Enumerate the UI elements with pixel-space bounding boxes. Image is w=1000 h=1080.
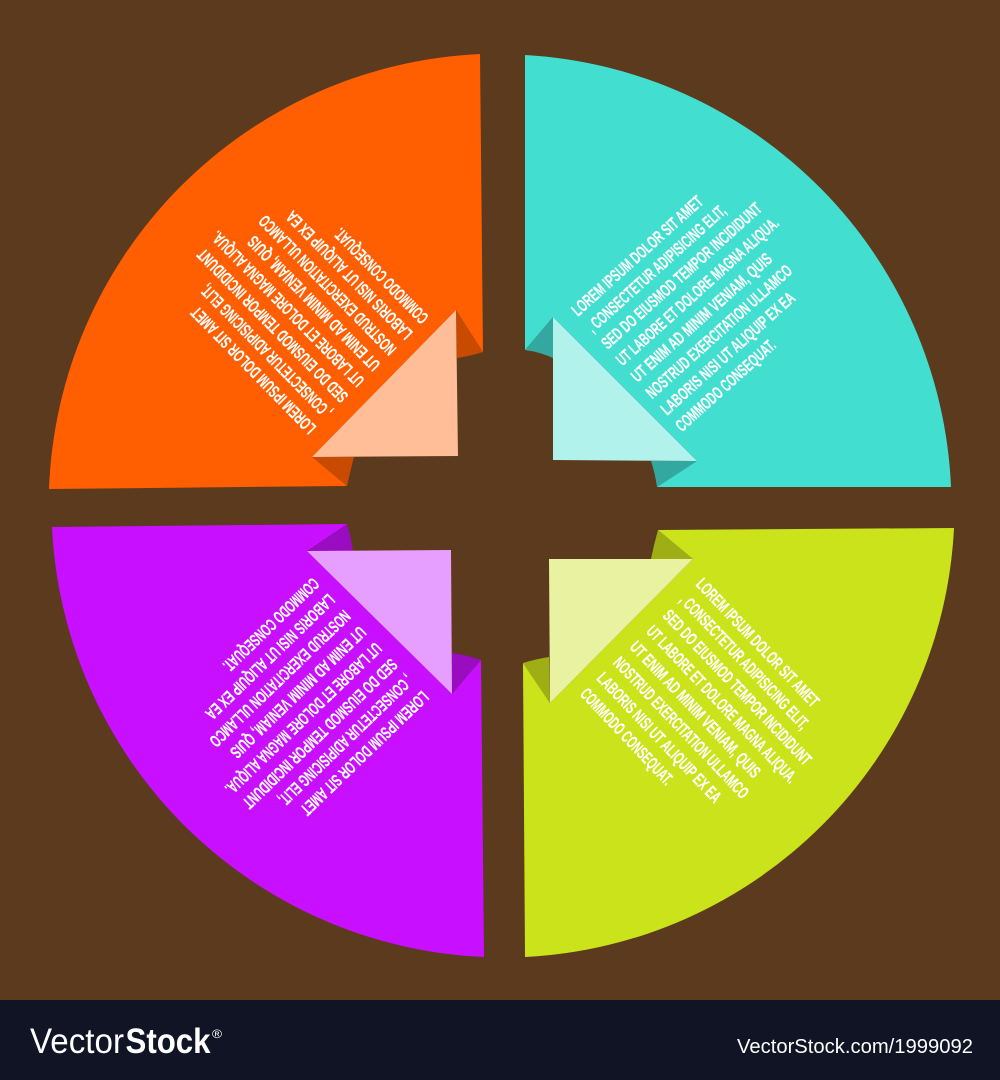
orange text block: LOREM IPSUM DOLOR SIT AMET — [186, 303, 320, 438]
purple text block: LOREM IPSUM DOLOR SIT AMET — [296, 687, 433, 820]
teal text block: COMMODO CONSEQUAT. — [671, 335, 780, 435]
purple sector — [52, 524, 484, 957]
teal text block: , CONSECTETUR ADIPISICING ELIT, — [582, 200, 730, 336]
footer logo: Stock — [126, 1022, 211, 1061]
orange sector — [49, 54, 483, 489]
orange text block: UT LABORE ET DOLORE MAGNA ALIQUA. — [207, 227, 368, 391]
green text block: UT ENIM AD MINIM VENIAM, QUIS — [626, 637, 765, 782]
green folded corner — [549, 559, 693, 703]
footer image id: VectorStock.com/1999092 — [737, 1036, 973, 1058]
orange text block — [159, 164, 432, 438]
orange folded corner — [312, 310, 458, 457]
purple text block: NOSTRUD EXERCITATION ULLAMCO — [206, 606, 355, 751]
teal text block: NOSTRUD EXERCITATION ULLAMCO — [642, 260, 796, 402]
panel: green quadrant — [523, 528, 954, 957]
purple fold shadows — [307, 524, 481, 694]
footer logo — [30, 1022, 222, 1061]
green sector — [523, 528, 954, 957]
teal text block: UT LABORE ET DOLORE MAGNA ALIQUA. — [612, 213, 783, 369]
purple text block — [158, 574, 433, 847]
green text block: UT LABORE ET DOLORE MAGNA ALIQUA. — [642, 621, 802, 787]
footer logo: Vector — [30, 1022, 124, 1061]
green text block: SED DO EIUSMOD TEMPOR INCIDIDUNT — [659, 605, 816, 770]
teal fold shadows — [525, 317, 697, 487]
green text block — [576, 574, 851, 850]
green text block: LOREM IPSUM DOLOR SIT AMET — [692, 574, 824, 711]
teal text block — [567, 163, 842, 435]
green text block: , CONSECTETUR ADIPISICING ELIT, — [676, 590, 813, 733]
panel: orange quadrant — [49, 54, 483, 489]
teal text block: UT ENIM AD MINIM VENIAM, QUIS — [627, 249, 776, 386]
purple text block: LABORIS NISI UT ALIQUIP EX EA — [201, 590, 339, 724]
green text block: COMMODO CONSEQUAT. — [576, 684, 678, 789]
orange fold shadows — [312, 310, 483, 486]
footer bar — [0, 1000, 1000, 1080]
green text block: NOSTRUD EXERCITATION ULLAMCO — [609, 652, 753, 803]
orange text block: UT ENIM AD MINIM VENIAM, QUIS — [243, 232, 384, 375]
orange text block: , CONSECTETUR ADIPISICING ELIT, — [196, 281, 336, 422]
orange text block: NOSTRUD EXERCITATION ULLAMCO — [254, 211, 400, 359]
orange text block: LABORIS NISI UT ALIQUIP EX EA — [282, 207, 416, 344]
purple text block: , CONSECTETUR ADIPISICING ELIT, — [275, 671, 417, 810]
orange text block: SED DO EIUSMOD TEMPOR INCIDIDUNT — [193, 245, 352, 407]
purple text block: COMMODO CONSEQUAT. — [219, 574, 323, 676]
teal text block: LABORIS NISI UT ALIQUIP EX EA — [656, 288, 799, 419]
teal sector — [525, 55, 951, 487]
green fold shadows — [523, 530, 693, 703]
purple text block: SED DO EIUSMOD TEMPOR INCIDIDUNT — [239, 655, 402, 813]
panel: purple quadrant — [52, 524, 484, 957]
orange text block: COMMODO CONSEQUAT. — [330, 224, 432, 328]
purple text block: UT ENIM AD MINIM VENIAM, QUIS — [226, 622, 370, 763]
purple folded corner — [307, 550, 452, 694]
teal folded corner — [553, 317, 697, 461]
teal text block: SED DO EIUSMOD TEMPOR INCIDIDUNT — [597, 198, 766, 353]
teal text block: LOREM IPSUM DOLOR SIT AMET — [567, 191, 707, 320]
purple text block: UT LABORE ET DOLORE MAGNA ALIQUA. — [221, 639, 386, 799]
panel: teal quadrant — [525, 55, 951, 487]
footer logo: ® — [212, 1027, 222, 1041]
green text block: LABORIS NISI UT ALIQUIP EX EA — [593, 668, 726, 807]
